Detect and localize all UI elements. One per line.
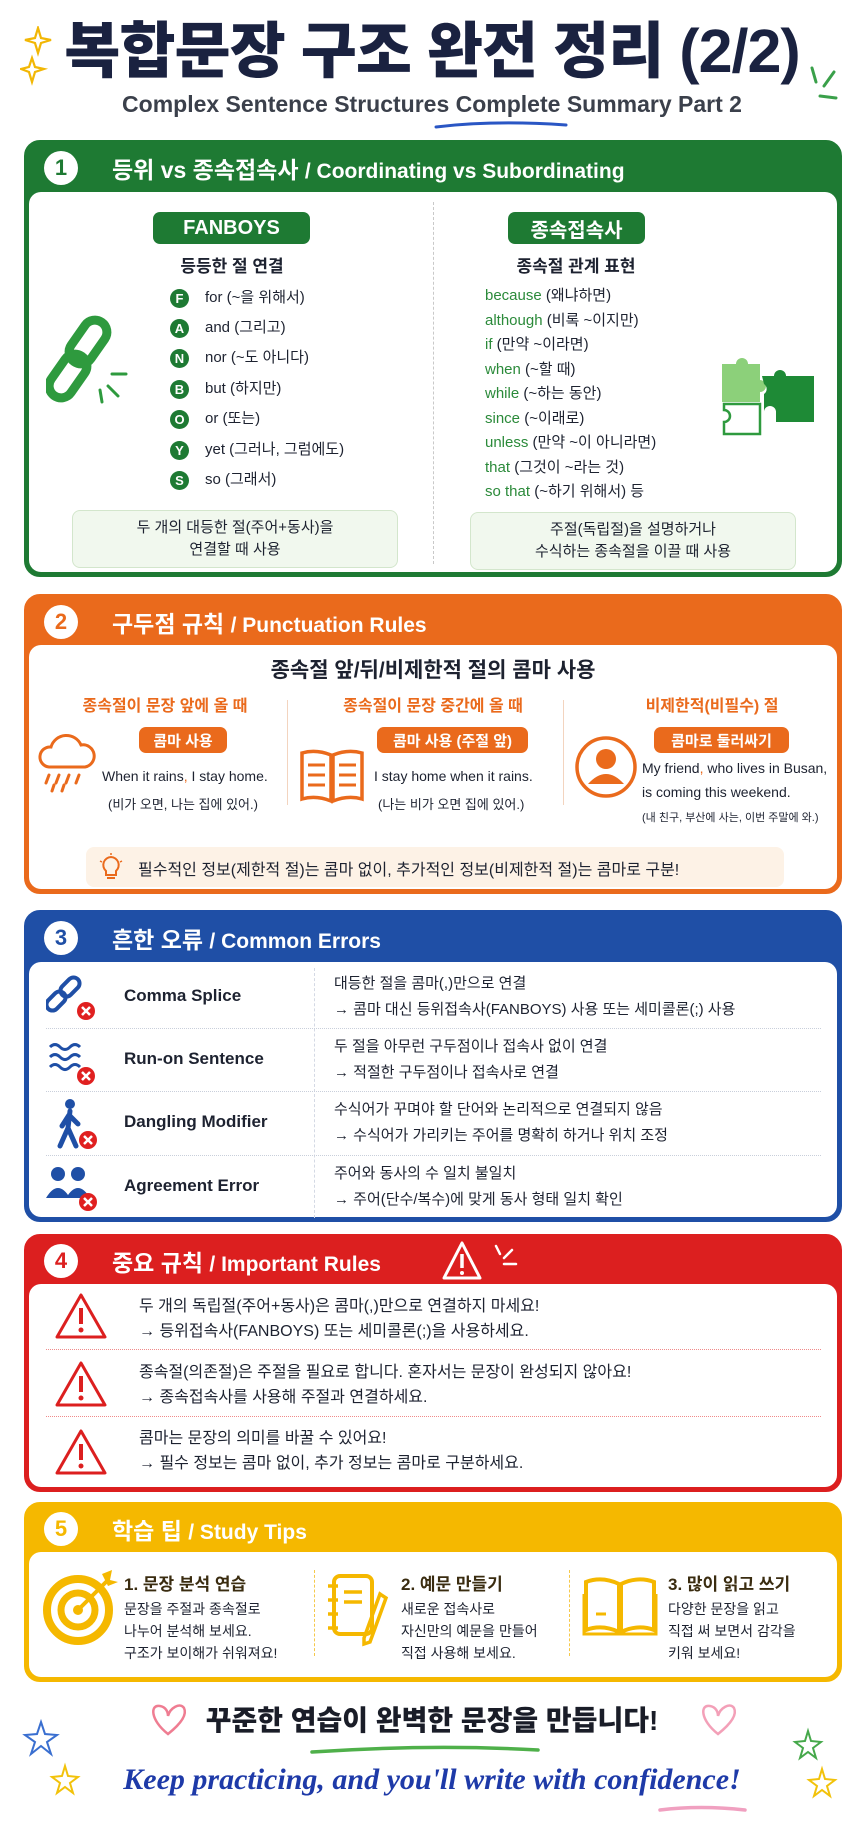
FANBOYS list: A bbox=[175, 321, 184, 336]
left summary box: 두 개의 대등한 절(주어+동사)을 bbox=[137, 519, 333, 536]
panel 2: punctuation rules bbox=[24, 594, 842, 894]
tip 3: 다양한 문장을 읽고 bbox=[668, 1601, 779, 1617]
column 1: clause first: 종속절이 문장 앞에 올 때 bbox=[82, 698, 247, 715]
FANBOYS list: but (하지만) bbox=[205, 380, 281, 397]
rule 1: → 등위접속사(FANBOYS) 또는 세미콜론(;)을 사용하세요. bbox=[139, 1323, 529, 1340]
error row: comma splice bbox=[46, 975, 735, 1020]
column 2: clause middle: (나는 비가 오면 집에 있어.) bbox=[378, 797, 524, 812]
tip 2 bbox=[328, 1574, 538, 1661]
rule 3: 콤마는 문장의 의미를 바꿀 수 있어요! bbox=[139, 1430, 386, 1447]
error row: comma splice: → 콤마 대신 등위접속사(FANBOYS) 사용 또는 세미콜론(;) 사용 bbox=[334, 1001, 735, 1018]
subordinating list: that (그것이 ~라는 것) bbox=[485, 458, 624, 476]
FANBOYS list: O bbox=[174, 412, 185, 427]
column 3: non-restrictive bbox=[575, 697, 827, 824]
column 2: clause middle bbox=[300, 697, 533, 812]
tip 2: 새로운 접속사로 bbox=[401, 1601, 495, 1617]
header 4: 4 bbox=[55, 1248, 67, 1273]
column 3: non-restrictive: 콤마로 둘러싸기 bbox=[671, 732, 772, 750]
error row: dangling modifier bbox=[58, 1099, 668, 1149]
FANBOYS list: nor (~도 아니다) bbox=[205, 349, 309, 366]
header 2 bbox=[44, 605, 427, 639]
footer decorations: hearts and stars bbox=[22, 1704, 838, 1812]
FANBOYS list: Y bbox=[175, 443, 184, 458]
tip 3: 3. 많이 읽고 쓰기 bbox=[668, 1575, 790, 1594]
tip 2: 직접 사용해 보세요. bbox=[401, 1645, 516, 1661]
FANBOYS list: S bbox=[175, 473, 184, 488]
column 3: non-restrictive: My friend, who lives in Busan, bbox=[642, 760, 827, 776]
header 3 bbox=[44, 921, 381, 955]
subordinating list: if (만약 ~이라면) bbox=[485, 336, 589, 353]
tip 1 bbox=[43, 1570, 277, 1661]
tip 1: 1. 문장 분석 연습 bbox=[124, 1575, 246, 1594]
header 2: 2 bbox=[55, 608, 67, 634]
FANBOYS list: yet (그러나, 그럼에도) bbox=[205, 441, 344, 458]
FANBOYS list bbox=[170, 289, 344, 490]
column 2: clause middle: 종속절이 문장 중간에 올 때 bbox=[343, 698, 523, 715]
tip bar: 필수적인 정보(제한적 절)는 콤마 없이, 추가적인 정보(비제한적 절)는 콤마로 구분! bbox=[138, 862, 679, 879]
right summary box: 주절(독립절)을 설명하거나 bbox=[550, 521, 716, 538]
subtitle: Complex Sentence Structures Complete Summary Part 2 bbox=[122, 91, 742, 117]
subordinating badge bbox=[508, 212, 645, 244]
icon: two people with x bbox=[46, 1167, 97, 1211]
subordinating list: so that (~하기 위해서) 등 bbox=[485, 483, 644, 500]
icon: rain cloud bbox=[38, 734, 96, 792]
header 4 bbox=[44, 1241, 518, 1280]
error row: comma splice: Comma Splice bbox=[124, 986, 241, 1005]
panel 5: study tips bbox=[24, 1502, 842, 1682]
subordinating list: although (비록 ~이지만) bbox=[485, 312, 639, 328]
error row: run-on: Run-on Sentence bbox=[124, 1049, 264, 1068]
icon: person bbox=[575, 736, 637, 798]
panel 4: important rules bbox=[24, 1234, 842, 1492]
panel 2 subheading: 종속절 앞/뒤/비제한적 절의 콤마 사용 bbox=[271, 659, 595, 682]
header 3: 흔한 오류 / Common Errors bbox=[112, 927, 381, 953]
FANBOYS list: N bbox=[175, 351, 184, 366]
panel 3: common errors bbox=[24, 910, 842, 1222]
header 1: 1 bbox=[55, 155, 67, 180]
tip 1: 나누어 분석해 보세요. bbox=[124, 1623, 252, 1639]
rule 1 bbox=[56, 1293, 539, 1340]
error row: agreement bbox=[46, 1165, 623, 1211]
tip 1: 구조가 보이해가 쉬워져요! bbox=[124, 1645, 277, 1661]
icon: open book bbox=[300, 750, 364, 804]
tip bar bbox=[86, 847, 784, 887]
subordinating list: while (~하는 동안) bbox=[485, 385, 601, 402]
icon: waves with x bbox=[49, 1043, 95, 1085]
FANBOYS list: and (그리고) bbox=[205, 319, 286, 336]
subordinating list: because (왜냐하면) bbox=[485, 287, 611, 304]
icon: header warning bbox=[442, 1241, 518, 1280]
error row: agreement: 주어와 동사의 수 일치 불일치 bbox=[334, 1165, 516, 1182]
decorative sparkle right bbox=[810, 66, 838, 100]
subordinating list bbox=[485, 287, 656, 500]
column 2: clause middle: I stay home when it rains. bbox=[374, 768, 533, 784]
footer Korean slogan: 꾸준한 연습이 완벽한 문장을 만듭니다! bbox=[206, 1705, 658, 1736]
error row: agreement: → 주어(단수/복수)에 맞게 동사 형태 일치 확인 bbox=[334, 1191, 623, 1208]
rule 2 bbox=[56, 1361, 631, 1406]
error row: run-on: 두 절을 아무런 구두점이나 접속사 없이 연결 bbox=[334, 1038, 607, 1055]
subordinating list: unless (만약 ~이 아니라면) bbox=[485, 434, 656, 451]
header 5 bbox=[44, 1512, 307, 1546]
rule 2: 종속절(의존절)은 주절을 필요로 합니다. 혼자서는 문장이 완성되지 않아요! bbox=[139, 1364, 631, 1381]
error row: dangling modifier: → 수식어가 가리키는 주어를 명확히 하거나 위치 조정 bbox=[334, 1127, 668, 1144]
column 1: clause first: When it rains, I stay home. bbox=[102, 768, 268, 784]
right subheading: 종속절 관계 표현 bbox=[517, 257, 635, 276]
icon: walking person with x bbox=[58, 1099, 97, 1149]
column 3: non-restrictive: (내 친구, 부산에 사는, 이번 주말에 와.) bbox=[642, 812, 819, 824]
error row: dangling modifier: 수식어가 꾸며야 할 단어와 논리적으로 연결되지 않음 bbox=[334, 1101, 663, 1118]
icon: puzzle bbox=[722, 358, 814, 436]
right summary box: 수식하는 종속절을 이끌 때 사용 bbox=[535, 543, 731, 560]
column 1: clause first bbox=[38, 697, 268, 812]
left summary box: 연결할 때 사용 bbox=[189, 541, 281, 558]
tip 3: 키워 보세요! bbox=[668, 1645, 740, 1661]
subordinating badge: 종속접속사 bbox=[530, 220, 622, 242]
tip 3 bbox=[582, 1575, 796, 1661]
FANBOYS list: F bbox=[176, 291, 183, 306]
FANBOYS list: for (~을 위해서) bbox=[205, 289, 305, 306]
rule 2: → 종속접속사를 사용해 주절과 연결하세요. bbox=[139, 1389, 427, 1406]
tip 2: 자신만의 예문을 만들어 bbox=[401, 1623, 538, 1639]
tip 1: 문장을 주절과 종속절로 bbox=[124, 1601, 261, 1617]
icon: broken chain bbox=[46, 316, 128, 404]
left summary box bbox=[72, 510, 398, 568]
column 3: non-restrictive: 비제한적(비필수) 절 bbox=[646, 698, 778, 715]
title: 복합문장 구조 완전 정리 (2/2) bbox=[64, 17, 800, 85]
column 3: non-restrictive: is coming this weekend. bbox=[642, 784, 791, 800]
header 5: 학습 팁 / Study Tips bbox=[112, 1518, 307, 1544]
error row: run-on bbox=[49, 1038, 607, 1085]
column 2: clause middle: 콤마 사용 (주절 앞) bbox=[393, 732, 512, 750]
error row: dangling modifier: Dangling Modifier bbox=[124, 1112, 268, 1131]
rule 3: → 필수 정보는 콤마 없이, 추가 정보는 콤마로 구분하세요. bbox=[139, 1455, 523, 1472]
rule 3 bbox=[56, 1429, 523, 1474]
column 1: clause first: (비가 오면, 나는 집에 있어.) bbox=[108, 797, 258, 812]
header 3: 3 bbox=[55, 925, 67, 950]
error row: run-on: → 적절한 구두점이나 접속사로 연결 bbox=[334, 1064, 559, 1081]
FANBOYS badge bbox=[153, 212, 310, 244]
subordinating list: when (~할 때) bbox=[485, 360, 576, 378]
error row: agreement: Agreement Error bbox=[124, 1176, 259, 1195]
right summary box bbox=[470, 512, 796, 570]
tip 3: 직접 써 보면서 감각을 bbox=[668, 1623, 796, 1639]
FANBOYS list: or (또는) bbox=[205, 410, 260, 427]
FANBOYS list: so (그래서) bbox=[205, 471, 276, 488]
header 2: 구두점 규칙 / Punctuation Rules bbox=[112, 610, 427, 636]
header 1 bbox=[44, 151, 625, 185]
tip 2: 2. 예문 만들기 bbox=[401, 1575, 503, 1594]
header 4: 중요 규칙 / Important Rules bbox=[112, 1250, 381, 1276]
error row: comma splice: 대등한 절을 콤마(,)만으로 연결 bbox=[334, 975, 526, 992]
subordinating list: since (~이래로) bbox=[485, 410, 584, 426]
FANBOYS list: B bbox=[175, 382, 184, 397]
decorative stars top-left bbox=[20, 26, 52, 86]
header 1: 등위 vs 종속접속사 / Coordinating vs Subordinating bbox=[112, 157, 625, 183]
panel 1: coordinating vs subordinating bbox=[24, 140, 842, 577]
column 1: clause first: 콤마 사용 bbox=[153, 732, 213, 750]
FANBOYS badge: FANBOYS bbox=[183, 216, 280, 238]
rule 1: 두 개의 독립절(주어+동사)은 콤마(,)만으로 연결하지 마세요! bbox=[139, 1298, 539, 1315]
footer English slogan: Keep practicing, and you'll write with confidence! bbox=[123, 1763, 741, 1796]
header 5: 5 bbox=[55, 1516, 67, 1541]
icon: lightbulb bbox=[100, 853, 122, 879]
left subheading: 등등한 절 연결 bbox=[180, 257, 284, 276]
icon: chain with x bbox=[46, 976, 95, 1020]
